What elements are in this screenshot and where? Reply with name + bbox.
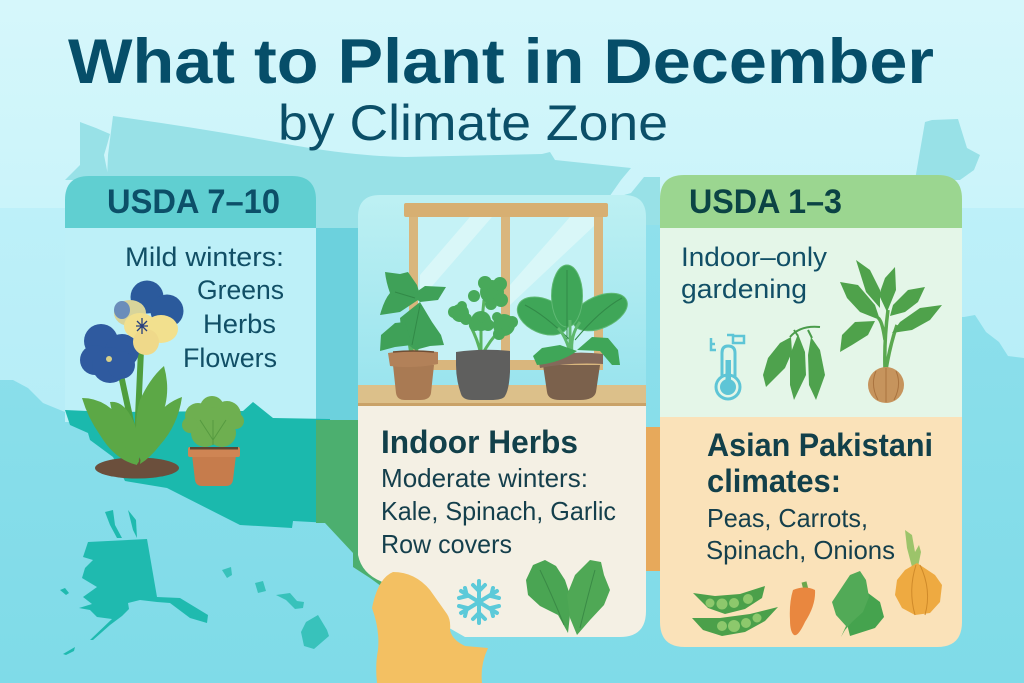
grey pot [456, 350, 510, 400]
seedling leaves [840, 260, 942, 352]
spinach stems [558, 320, 580, 354]
heading: Indoor Herbs: Indoor Herbs [381, 424, 578, 460]
map: teal zone west [65, 402, 330, 528]
window sill [358, 385, 646, 404]
map: orange zone east [640, 427, 664, 571]
clay pot [393, 365, 434, 400]
map: Maine silhouette [915, 119, 980, 180]
background lower band [0, 208, 1024, 683]
map: lower land mass [0, 225, 1024, 683]
panel: USDA 1-3 [660, 175, 962, 647]
map: Alaska [60, 510, 208, 655]
seedling stem [878, 310, 897, 370]
panel header [65, 176, 316, 228]
icon: snowflake [459, 581, 499, 623]
icon: pansy flowers plant [80, 280, 184, 478]
gauge ticks [711, 335, 744, 350]
icon: basil in clay pot [380, 272, 446, 400]
yellow-blue pansy bloom [114, 280, 184, 355]
brown pot [543, 365, 600, 400]
pot [192, 455, 236, 486]
three pods [763, 334, 825, 400]
panel: USDA 7-10 [65, 176, 316, 422]
panel header [660, 175, 962, 228]
text: Moderate winters: Moderate winters: [381, 463, 588, 493]
panel body [65, 226, 316, 422]
icon: seedling with bulb [840, 260, 942, 403]
basil leaves [380, 272, 446, 351]
map: northern United States silhouette [100, 116, 660, 230]
panel: indoor herbs [358, 195, 646, 637]
thermometer outline [722, 346, 735, 385]
icon: carrot [790, 582, 815, 635]
icon: pea pods with peas [692, 586, 778, 636]
window frame [404, 203, 608, 370]
text: Mild winters: Mild winters: [125, 242, 284, 272]
pod stem [790, 327, 820, 338]
text: Row covers: Row covers [381, 529, 512, 559]
icon: spinach bunch [832, 571, 884, 637]
window glass [417, 217, 595, 363]
map: gap strip between panels [316, 228, 358, 421]
text: Greens: Greens [197, 275, 284, 305]
icon: thermometer [711, 335, 744, 399]
stems [121, 350, 141, 462]
blue pansy bloom [80, 324, 139, 383]
text: gardening: gardening [681, 274, 807, 304]
upper pod [693, 586, 765, 614]
soil mound [95, 458, 179, 478]
map: green zone centre [316, 420, 400, 600]
large leaves [511, 265, 633, 343]
parsley leaves [448, 276, 518, 340]
title: What to Plant in December [68, 27, 934, 97]
subtitle: by Climate Zone [278, 95, 668, 151]
cream text card [358, 406, 646, 637]
text: Peas, Carrots: Peas, Carrots, [707, 503, 868, 533]
heading: climates: climates: [707, 463, 841, 499]
icon: spinach leaves [526, 560, 610, 635]
leaves [82, 366, 182, 465]
heading: Asian Pakistani: Asian Pakistani [707, 427, 933, 463]
peas [706, 594, 762, 632]
basil stems [408, 332, 420, 358]
map: yellow zone south [372, 572, 488, 683]
icon: pea pods [763, 327, 825, 400]
map: Hawaii islands [222, 567, 329, 649]
background sky [0, 0, 1024, 210]
map: northwest corner silhouette [65, 122, 110, 180]
mercury [720, 379, 736, 395]
lettuce leaves [182, 396, 244, 447]
onion stalk [905, 530, 921, 567]
heading: USDA 1-3: USDA 1–3 [689, 183, 842, 221]
upper panel body [660, 226, 962, 418]
onion bulb [895, 563, 942, 615]
text: Indoor-only: Indoor–only [681, 242, 828, 272]
lower panel body [660, 417, 962, 647]
icon: parsley in grey pot [448, 276, 518, 400]
text: Kale, Spinach, Garlic: Kale, Spinach, Garlic [381, 496, 616, 526]
icon: lettuce in terracotta pot [182, 396, 244, 486]
parsley stems [470, 300, 500, 355]
icon: onion [895, 530, 942, 615]
window backdrop [358, 195, 646, 388]
text: Spinach, Onions: Spinach, Onions [706, 535, 895, 565]
heading: USDA 7-10: USDA 7–10 [107, 183, 280, 221]
text: Flowers: Flowers [183, 343, 277, 373]
text: Herbs: Herbs [203, 309, 276, 339]
icon: spinach in brown pot [511, 265, 633, 400]
bulb [868, 367, 904, 403]
lower pod [692, 607, 778, 636]
lower leaves [533, 337, 620, 365]
